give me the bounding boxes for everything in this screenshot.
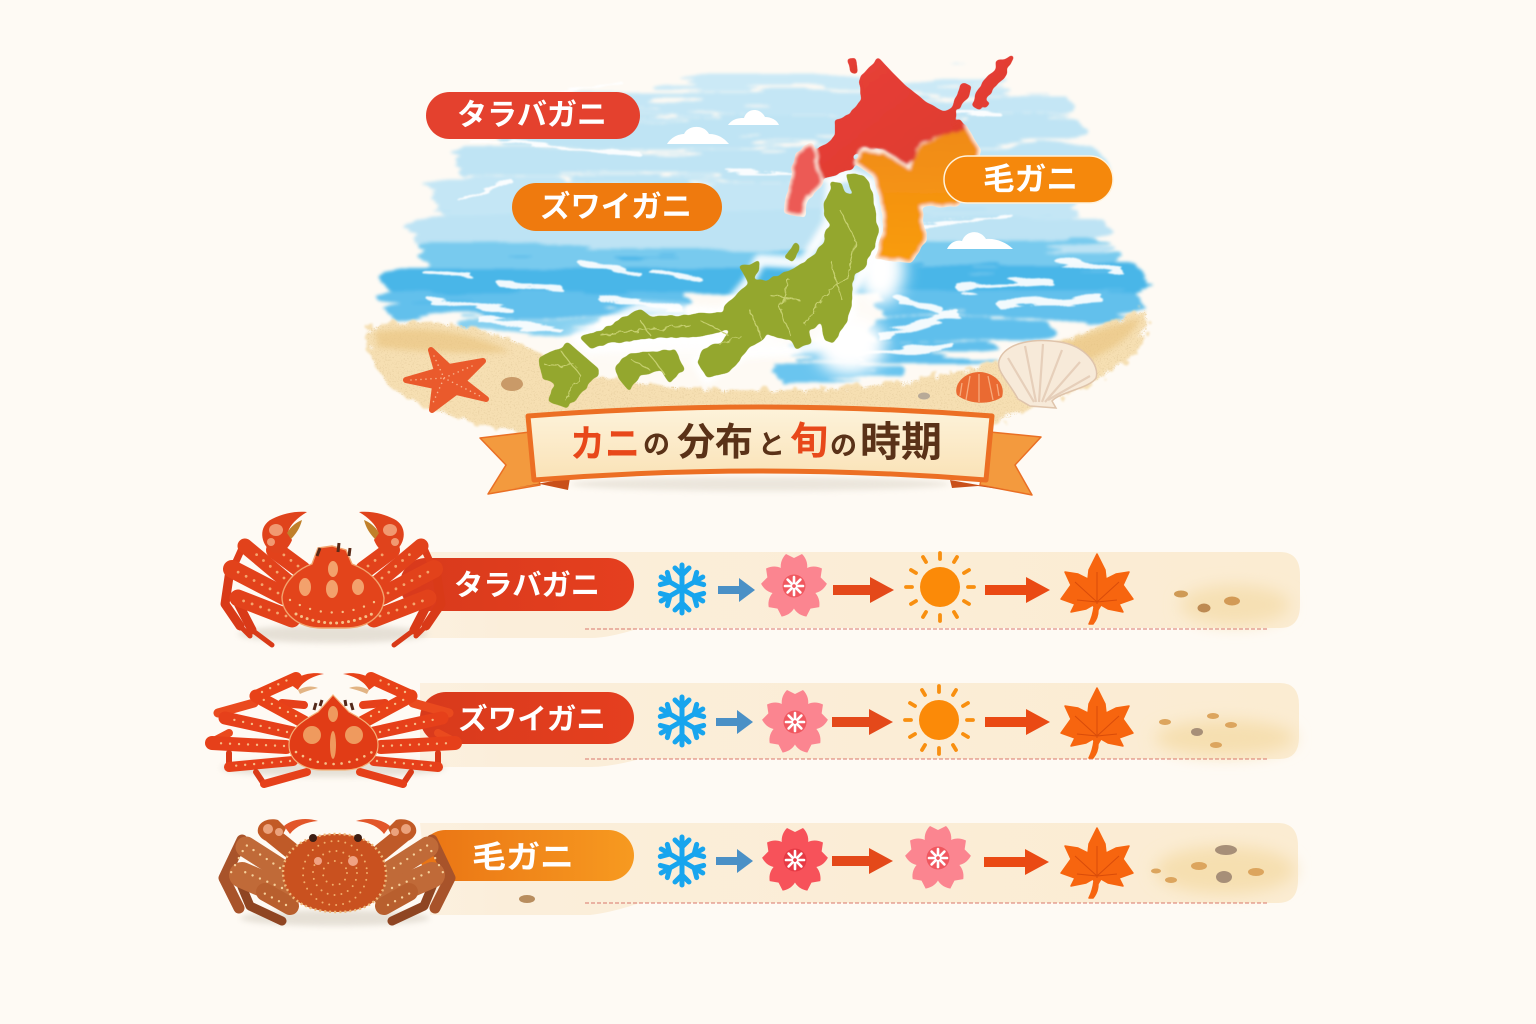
sand speckle (367, 310, 1148, 436)
region: Sakhalin pink-red (785, 143, 823, 216)
crab label: タラバガニ (454, 569, 600, 602)
season sequence (658, 553, 1133, 624)
region: Sado island (784, 242, 800, 262)
season sequence (658, 826, 1133, 898)
region: Honshu green (579, 173, 878, 378)
ribbon title text: カニ (570, 424, 640, 466)
arrow (833, 577, 894, 603)
dashed line (585, 902, 1268, 904)
timeline band (420, 552, 1300, 638)
timeline band (420, 823, 1298, 915)
ribbon title text: の (643, 430, 670, 460)
crab label (400, 558, 634, 611)
white halo around Japan (579, 173, 878, 378)
blue arrow (716, 710, 753, 734)
arrow (984, 849, 1049, 875)
autumn: maple leaf (1061, 828, 1133, 898)
ribbon folds (514, 478, 1006, 490)
title ribbon (480, 407, 1041, 495)
region: Hokkaido red (817, 56, 1014, 178)
shore foam (565, 235, 905, 375)
ribbon shadow (570, 477, 950, 491)
small orange shell (956, 372, 1003, 403)
map scene: sea, beach and Japan (367, 56, 1148, 436)
sand beach (367, 310, 1148, 436)
ribbon panel (528, 407, 992, 480)
arrow (985, 709, 1050, 735)
winter: snowflake (658, 565, 706, 613)
row 3: 毛ガニ (224, 819, 1298, 926)
region: Kyushu green (539, 343, 600, 408)
cloud (728, 110, 779, 125)
ribbon title text: 分布 (677, 422, 753, 464)
crab: 毛ガニ (224, 819, 450, 926)
crab label (420, 692, 634, 744)
crab label (420, 830, 634, 881)
row 1: タラバガニ (225, 512, 1300, 645)
blue arrow (716, 849, 753, 873)
winter: snowflake (658, 697, 706, 745)
arrow (832, 709, 893, 735)
darker sand tint (375, 318, 1140, 378)
spring: cherry blossom (760, 690, 830, 756)
ribbon title text: 旬 (790, 421, 828, 463)
northern regions: Hokkaido, Sakhalin, Tohoku (785, 56, 1014, 262)
map label: タラバガニ: タラバガニ (457, 99, 607, 132)
map label: 毛ガニ (944, 156, 1113, 203)
arrow (832, 848, 893, 874)
crab label: ズワイガニ (458, 702, 606, 736)
starfish (406, 350, 486, 410)
winter: snowflake (658, 837, 706, 885)
crab: タラバガニ (225, 512, 441, 645)
pebble (501, 377, 523, 391)
autumn: maple leaf (1061, 688, 1133, 758)
crab label: 毛ガニ (472, 840, 574, 875)
spring: cherry blossom (903, 826, 973, 892)
region: Tohoku orange (855, 125, 980, 262)
map label: 毛ガニ: 毛ガニ (983, 162, 1078, 197)
ribbon title text: の (830, 431, 857, 461)
crab: ズワイガニ (210, 673, 457, 784)
ribbon right tail (980, 432, 1041, 495)
autumn: maple leaf (1061, 554, 1133, 624)
cloud (667, 127, 729, 144)
dashed line (585, 628, 1268, 630)
ribbon title text: と (758, 430, 785, 460)
season sequence (658, 686, 1133, 758)
summer: sun (906, 553, 974, 621)
cloud (947, 232, 1013, 249)
row 2: ズワイガニ (210, 673, 1299, 784)
dashed line (585, 758, 1268, 760)
ribbon title text: 時期 (860, 419, 942, 465)
summer: sun (905, 686, 973, 754)
prefecture lines (545, 210, 856, 400)
sea foam (425, 82, 1120, 356)
timeline band (420, 683, 1299, 767)
spring: cherry blossom (759, 554, 829, 620)
blue arrow (718, 578, 755, 602)
sky-blue water wash (430, 84, 1090, 232)
scallop shell (999, 341, 1097, 408)
ribbon title text (570, 419, 942, 466)
spring: deep cherry blossom (760, 828, 830, 894)
map label: ズワイガニ: ズワイガニ (540, 190, 692, 224)
arrow (985, 577, 1050, 603)
deep-blue sea (395, 256, 1130, 372)
map label: ズワイガニ (512, 183, 722, 231)
pebble (918, 392, 930, 400)
region: Shikoku green (615, 350, 684, 392)
ribbon left tail (480, 432, 540, 494)
map label: タラバガニ (426, 92, 640, 139)
